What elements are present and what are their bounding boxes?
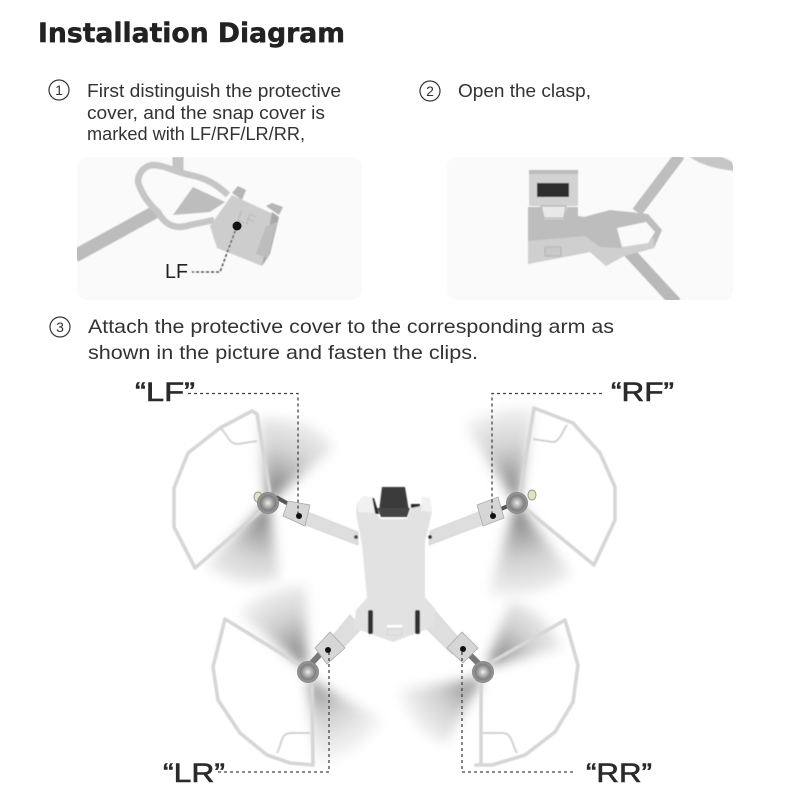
panel: open clasp — [527, 157, 733, 300]
propeller blur: left rear — [238, 585, 382, 763]
step 2 text: Open the clasp, — [458, 81, 591, 101]
callout line: LR — [218, 647, 331, 772]
step 3 text: Attach the protective cover to the corresponding arm as — [88, 316, 614, 338]
step 3 text — [88, 316, 614, 364]
step 2 number: 2 — [426, 83, 434, 99]
step 1 text: cover, and the snap cover is — [87, 103, 325, 123]
opened flap — [529, 170, 578, 218]
title: Installation Diagram — [38, 18, 345, 49]
motor hub: left rear — [298, 632, 345, 682]
step 3 number — [50, 317, 70, 337]
panel: cover with LF marking — [77, 157, 284, 278]
step 1 text: First distinguish the protective — [87, 81, 341, 101]
motor hub: right front — [477, 490, 536, 526]
guard: left rear — [213, 619, 313, 765]
callout line: LF — [188, 394, 302, 519]
snap cover block — [210, 186, 283, 266]
callout: LF marker line — [192, 226, 237, 272]
cover clip loop — [138, 165, 228, 227]
step 1 number — [49, 80, 69, 100]
step 1 text: marked with LF/RF/LR/RR, — [87, 124, 305, 144]
motor hub: left front — [254, 492, 310, 526]
label: RR: “RR” — [586, 758, 652, 788]
step 3 text: shown in the picture and fasten the clips. — [88, 342, 478, 364]
drone arms — [303, 510, 487, 654]
label: LR: “LR” — [163, 758, 225, 788]
callout label: LF: LF — [165, 261, 188, 283]
guard: left front — [174, 411, 270, 568]
label: RF: “RF” — [611, 377, 674, 407]
step 1 text — [87, 81, 341, 144]
drone body — [354, 487, 436, 642]
propeller blur: right rear — [400, 601, 562, 745]
snap cover block: LF — [235, 209, 258, 231]
propeller blur: left front — [205, 418, 335, 583]
clasp rods — [628, 155, 735, 303]
motor hub: right rear — [447, 632, 494, 682]
cover arm rods — [75, 157, 178, 256]
step 2 number — [420, 81, 440, 101]
label: LF: “LF” — [135, 377, 195, 407]
callout line: RR — [460, 646, 573, 772]
step 3 number: 3 — [56, 319, 64, 335]
drone diagram — [135, 377, 674, 788]
clasp body — [528, 207, 662, 266]
step 1 number: 1 — [55, 82, 63, 98]
propeller blur: right front — [465, 407, 572, 596]
callout line: RF — [490, 394, 602, 519]
guard: right rear — [476, 620, 578, 765]
guard: right front — [520, 408, 615, 565]
